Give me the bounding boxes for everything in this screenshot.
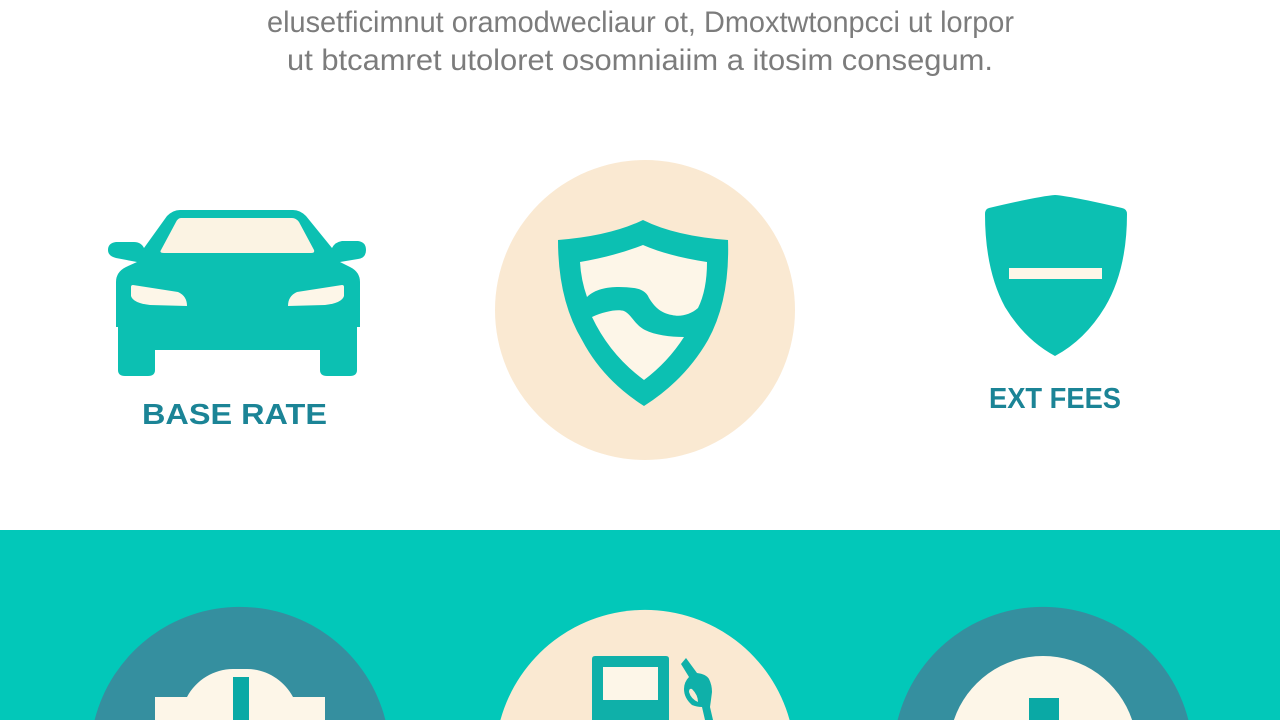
label: base rate: BASE RATE — [142, 399, 327, 431]
icon: circle with bar in blue circle — [898, 607, 1188, 720]
panel: teal bottom band — [0, 530, 1280, 720]
icon: dome with bar in blue circle — [95, 607, 385, 720]
pump screen — [603, 667, 658, 700]
left headlight — [131, 285, 187, 306]
minus bar — [1009, 268, 1102, 279]
label: extra fees: EXT FEES — [989, 383, 1121, 415]
intro text block: elusetficimnut oramodwecliaur ot, Dmoxtwtonpcci ut lorpor — [267, 6, 1014, 39]
icon: car, base rate — [108, 210, 366, 376]
right headlight — [288, 285, 344, 306]
icon: shield with bar, extra fees — [985, 195, 1127, 356]
icon: fuel pump in cream circle — [500, 610, 790, 720]
icon: insurance shield in cream circle — [495, 160, 795, 460]
shield upper panel — [580, 245, 707, 316]
windshield — [160, 218, 314, 253]
intro text block: ut btcamret utoloret osomniaiim a itosim consegum. — [287, 44, 993, 77]
shield lower panel — [592, 310, 684, 380]
intro text block — [267, 6, 1014, 77]
fuel nozzle — [681, 658, 713, 720]
